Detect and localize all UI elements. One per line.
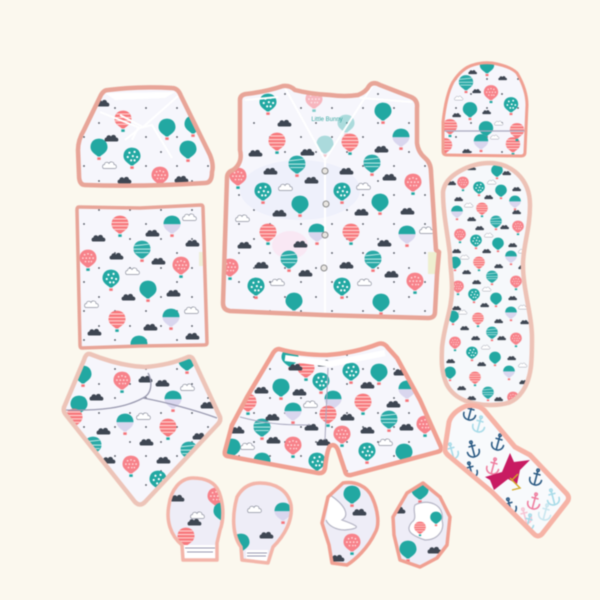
panel: right bootie xyxy=(392,482,450,567)
vest brand label: Little Bunny xyxy=(311,117,343,123)
panel: anchor burp cloth xyxy=(444,403,568,536)
panel: shorts xyxy=(224,344,441,475)
panel: right mitten xyxy=(232,483,292,563)
panel: bandana bib xyxy=(64,353,220,504)
vest snap buttons xyxy=(321,168,329,271)
panel: cloth diaper xyxy=(78,87,213,188)
panel: baby hat xyxy=(438,58,527,156)
panel: long pad xyxy=(442,163,532,406)
icon: pink ribbon bow xyxy=(485,453,530,490)
panel: left mitten xyxy=(168,478,230,560)
panel: sleeveless vest xyxy=(222,83,439,318)
panel: left bootie xyxy=(322,483,378,565)
panel: square cloth xyxy=(77,205,207,357)
